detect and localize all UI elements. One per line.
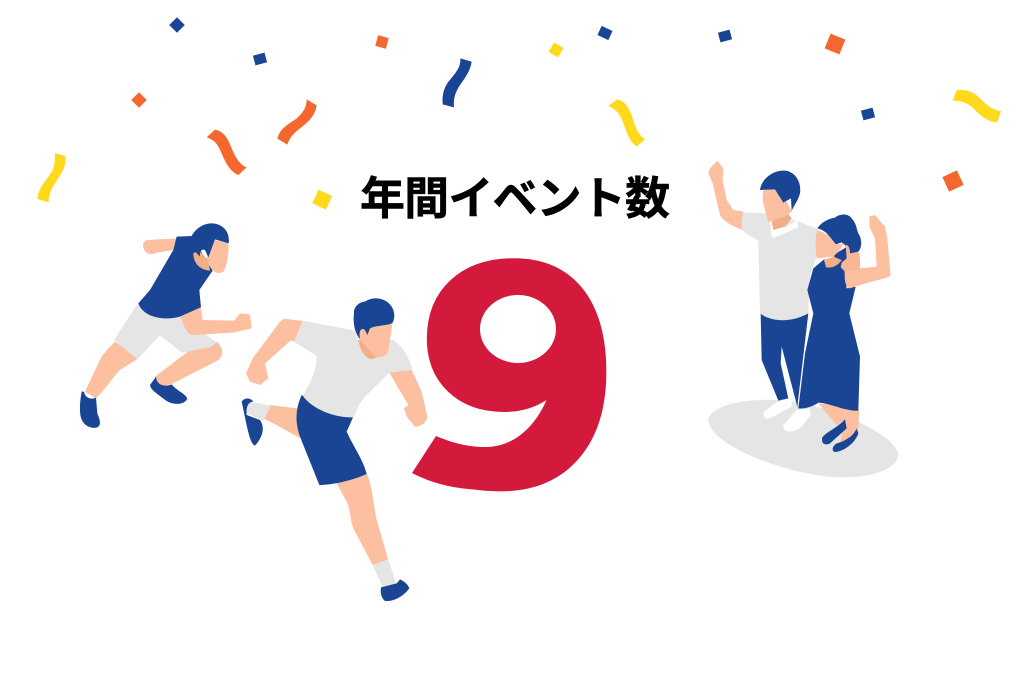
confetti ribbon, right — [953, 90, 1001, 122]
confetti — [37, 17, 1001, 210]
confetti ribbons, centre group — [442, 58, 645, 147]
man — [708, 161, 818, 431]
figure: male runner — [242, 298, 427, 601]
figure: dancing couple — [708, 161, 898, 477]
big number 9: 9 — [412, 203, 625, 559]
confetti squares — [131, 17, 964, 210]
woman — [798, 214, 891, 452]
floor shadow — [708, 400, 898, 477]
figure: female runner — [80, 223, 252, 428]
confetti ribbons, left group — [37, 99, 317, 202]
title: 年間イベント数 — [360, 173, 670, 224]
